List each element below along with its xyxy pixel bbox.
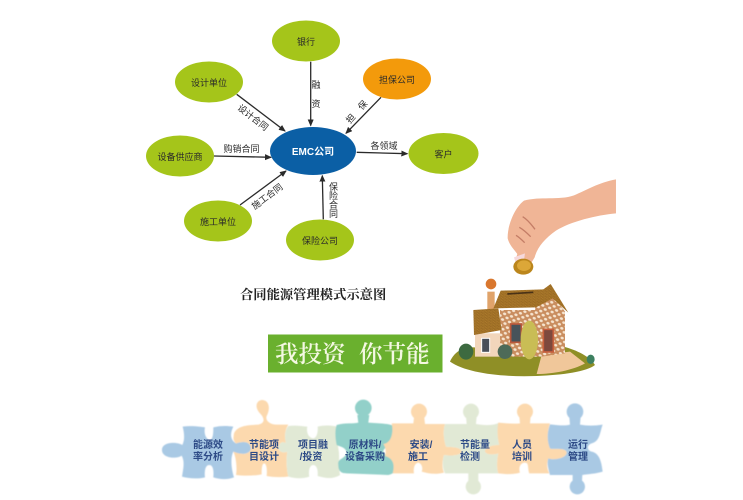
node: equipment supplier: 设备供应商 (157, 151, 203, 162)
arrow: insurance contract: 保 (329, 181, 338, 192)
arrow: insurance contract: 险 (329, 190, 338, 201)
puzzle piece 7 (485, 404, 567, 474)
arrow: all sectors: 各领域 (370, 140, 398, 151)
arrow: guarantee (343, 97, 381, 133)
puzzle piece 1 (162, 426, 251, 479)
arrow: design contract: 设计合同 (236, 102, 271, 133)
node: EMC company (270, 127, 356, 175)
node: customer (408, 133, 478, 174)
arrow: purchase contract (214, 143, 271, 157)
arrow: financing: 资 (311, 99, 321, 109)
node: guarantor (363, 58, 431, 100)
arrow: all sectors (357, 140, 407, 154)
node: construction firm (184, 200, 252, 242)
arrow: design contract (236, 94, 285, 133)
label: energy efficiency analysis: 率分析 (193, 450, 223, 463)
node: equipment supplier (146, 136, 214, 176)
arrow: insurance contract: 同 (329, 209, 338, 219)
node: customer: 客户 (434, 148, 453, 160)
arrow: insurance contract (322, 176, 338, 219)
node: bank: 银行 (297, 36, 315, 47)
node: bank (272, 20, 340, 62)
label: project design: 目设计 (249, 450, 279, 463)
label: installation: 施工 (408, 450, 428, 463)
label: energy efficiency analysis: 能源效 (193, 438, 223, 451)
puzzle piece 8 (548, 403, 603, 494)
node: design firm: 设计单位 (191, 77, 227, 88)
pieces (162, 400, 603, 494)
node: construction firm: 施工单位 (200, 216, 236, 227)
puzzle piece 5 (383, 404, 462, 474)
node: design firm (175, 62, 243, 102)
puzzle piece 4 (335, 400, 397, 475)
node: insurance company (286, 220, 354, 260)
label: procurement: 原材料/ (349, 438, 382, 451)
label: procurement: 设备采购 (345, 450, 385, 463)
label: staff training: 人员 (512, 439, 532, 451)
label: operations: 管理 (568, 450, 588, 463)
node: guarantor: 担保公司 (379, 74, 415, 85)
arrow: insurance contract: 合 (329, 199, 338, 210)
arrow: financing (311, 62, 321, 126)
arrow: guarantee: 担 保 (343, 98, 370, 125)
label: project design: 节能项 (249, 438, 279, 451)
label: energy savings measurement: 检测 (460, 450, 480, 463)
label: operations: 运行 (568, 438, 588, 451)
label: energy savings measurement: 节能量 (460, 438, 490, 451)
banner (268, 334, 442, 372)
label: financing: 项目融 (298, 439, 328, 451)
label: staff training: 培训 (512, 450, 532, 463)
diagram: EMC model (146, 20, 478, 260)
banner: 你节能 (359, 340, 430, 368)
arrow: construction contract (240, 171, 286, 211)
arrow: purchase contract: 购销合同 (223, 143, 260, 154)
title: 合同能源管理模式示意图 (240, 286, 386, 302)
node: EMC company: EMC公司 (292, 146, 334, 158)
banner: 我投资 (275, 341, 348, 368)
puzzle piece 2 (233, 400, 288, 477)
icon: house piggy bank (450, 279, 595, 376)
node: insurance company: 保险公司 (302, 235, 338, 246)
puzzle piece 3 (278, 425, 341, 478)
arrow: financing: 融 (311, 80, 321, 90)
label: financing: /投资 (300, 450, 322, 463)
puzzle piece 6 (443, 404, 499, 494)
arrow: construction contract: 施工合同 (249, 181, 285, 211)
label: installation: 安装/ (410, 438, 433, 451)
puzzle chain (162, 400, 603, 494)
icon: hand dropping coin (508, 179, 616, 275)
